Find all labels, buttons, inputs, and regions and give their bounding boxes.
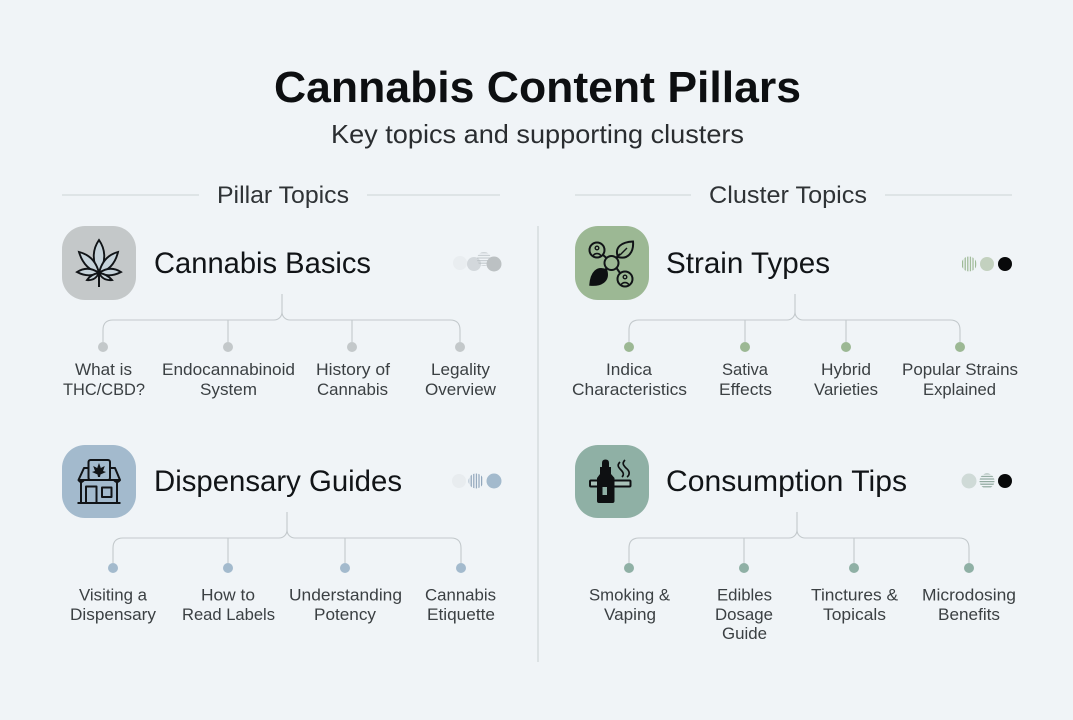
labels: Varieties bbox=[814, 380, 878, 399]
labels: System bbox=[200, 380, 257, 399]
labels: How to bbox=[201, 586, 255, 604]
labels: Etiquette bbox=[427, 605, 495, 624]
subtitle: Key topics and supporting clusters bbox=[331, 119, 744, 149]
panel: dispensary guides bbox=[62, 445, 502, 624]
labels: History of bbox=[316, 360, 390, 379]
icon: dispensary storefront bbox=[62, 445, 136, 518]
heading: strain types: Strain Types bbox=[666, 247, 830, 280]
labels: Dispensary bbox=[70, 605, 156, 624]
labels: Dosage bbox=[715, 605, 773, 624]
labels: Read Labels bbox=[182, 605, 275, 624]
connector tree bbox=[108, 512, 466, 573]
status dots bbox=[452, 474, 502, 488]
status dots bbox=[962, 474, 1012, 488]
labels: Characteristics bbox=[572, 380, 687, 399]
heading: cannabis basics: Cannabis Basics bbox=[154, 247, 371, 280]
labels bbox=[63, 360, 497, 399]
heading: consumption tips: Consumption Tips bbox=[666, 465, 907, 498]
heading: dispensary guides: Dispensary Guides bbox=[154, 465, 402, 498]
labels: Edibles bbox=[717, 586, 772, 604]
panel: cannabis basics bbox=[62, 226, 502, 399]
connector tree bbox=[98, 294, 465, 352]
labels: Endocannabinoid bbox=[162, 360, 295, 379]
labels: Understanding bbox=[289, 586, 402, 604]
heading: pillar topics: Pillar Topics bbox=[217, 182, 349, 209]
labels: Visiting a bbox=[79, 586, 148, 604]
heading: cluster topics: Cluster Topics bbox=[709, 182, 867, 209]
panel: strain types bbox=[572, 226, 1018, 399]
labels: Legality bbox=[431, 360, 490, 379]
labels: THC/CBD? bbox=[63, 380, 145, 399]
status dots bbox=[962, 256, 1012, 272]
labels: Overview bbox=[425, 380, 497, 399]
labels bbox=[572, 360, 1018, 399]
labels: Vaping bbox=[604, 605, 656, 624]
labels bbox=[70, 586, 496, 624]
connector tree bbox=[624, 512, 974, 573]
title: Cannabis Content Pillars bbox=[274, 63, 801, 112]
labels: Hybrid bbox=[821, 360, 871, 379]
labels: Cannabis bbox=[425, 586, 496, 604]
labels: Sativa bbox=[722, 360, 769, 379]
icon: cannabis leaf bbox=[62, 226, 136, 300]
labels: Smoking & bbox=[589, 586, 671, 604]
labels: Effects bbox=[719, 380, 772, 399]
labels: Explained bbox=[923, 380, 996, 399]
connector tree bbox=[624, 294, 965, 352]
icon: strain network bbox=[575, 226, 649, 300]
labels: Benefits bbox=[938, 605, 1000, 624]
labels: Microdosing bbox=[922, 586, 1016, 604]
labels bbox=[589, 586, 1016, 643]
labels: Potency bbox=[314, 605, 376, 624]
status dots bbox=[453, 252, 502, 272]
labels: Popular Strains bbox=[902, 360, 1018, 379]
labels: Topicals bbox=[823, 605, 886, 624]
labels: Cannabis bbox=[317, 380, 388, 399]
panel: consumption tips bbox=[575, 445, 1016, 643]
labels: What is bbox=[75, 360, 132, 379]
labels: Guide bbox=[722, 624, 767, 643]
labels: Tinctures & bbox=[811, 586, 899, 604]
labels: Indica bbox=[606, 360, 653, 379]
icon: dropper and cigarette bbox=[575, 445, 649, 518]
